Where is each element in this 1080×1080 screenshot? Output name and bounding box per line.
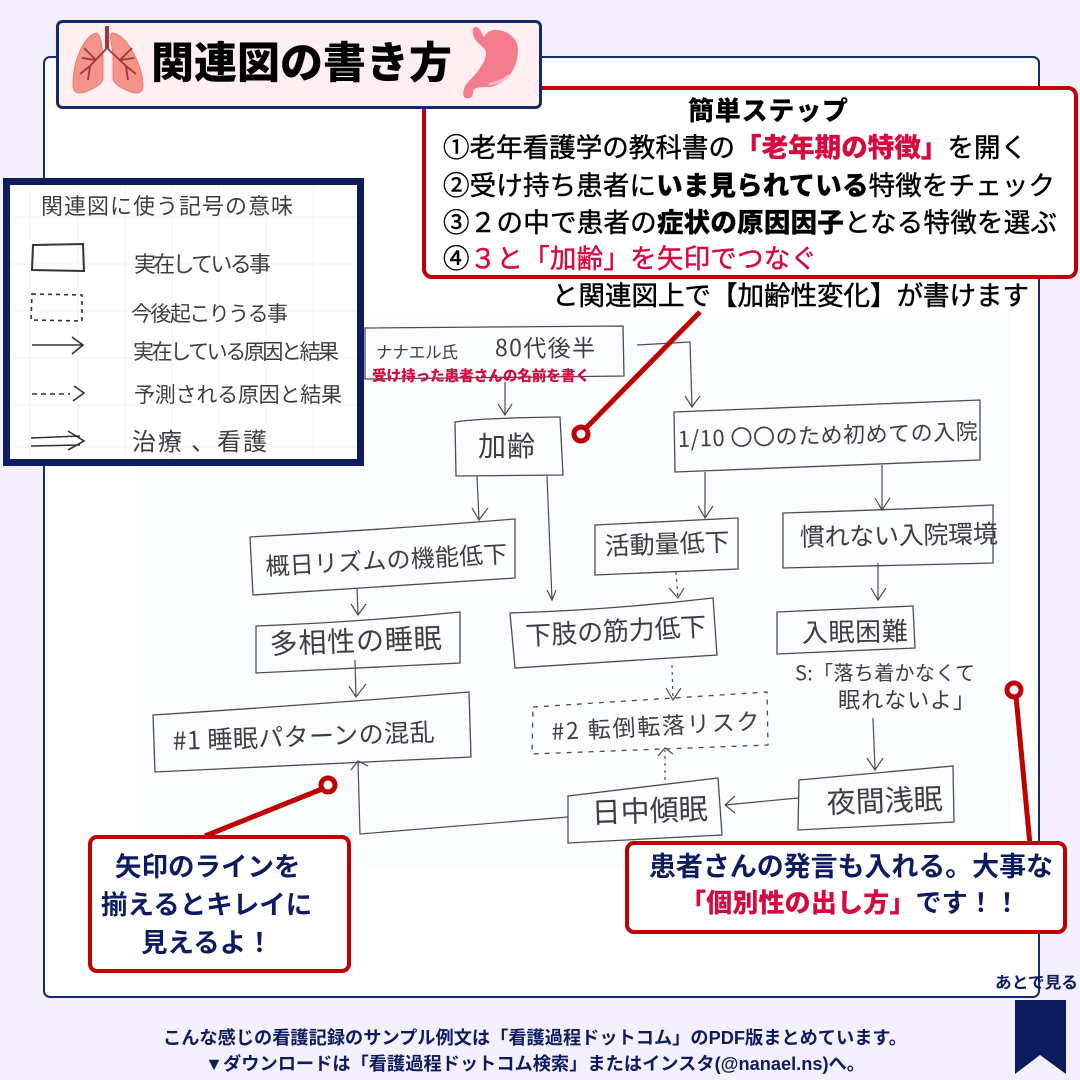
box: lower limb weakness <box>510 598 717 668</box>
footer text: こんな感じの看護記録のサンプル例文は「看護過程ドットコム」のPDF版まとめています。 <box>163 1027 907 1048</box>
legend row: dashed box <box>31 294 288 328</box>
legend grid <box>10 185 357 459</box>
legend row: solid arrow <box>32 336 339 366</box>
icon: stomach <box>463 27 518 98</box>
box: light night sleep <box>798 766 954 830</box>
legend row: double arrow <box>31 422 267 457</box>
box: first admission <box>674 400 980 472</box>
steps callout <box>424 88 1076 277</box>
legend row: solid box <box>32 244 271 279</box>
box: polyphasic sleep <box>256 612 460 673</box>
footer text: ▼ダウンロードは「看護過程ドットコム検索」またはインスタ(@nanael.ns)へ。 <box>205 1053 865 1074</box>
legend panel <box>6 182 360 462</box>
arrows <box>349 342 890 834</box>
box: aging <box>455 417 563 476</box>
box: reduced activity: 活動量低下 <box>604 523 730 563</box>
box: diagnosis 1: #1 睡眠パターンの混乱 <box>172 713 435 758</box>
callout: align arrow lines: 見えるよ！ <box>141 928 273 958</box>
box: aging: 加齢 <box>478 425 535 465</box>
box: daytime drowsiness <box>568 778 722 843</box>
step 4: ④３と「加齢」を矢印でつなぐ <box>443 244 817 274</box>
leader: aging <box>574 312 700 441</box>
step 3: ③２の中で患者の症状の原因因子となる特徴を選ぶ <box>443 208 1057 238</box>
red note: write patient's name: 受け持った患者さんの名前を書く <box>372 367 590 385</box>
legend title: 関連図に使う記号の意味 <box>41 189 293 221</box>
dashed box: diagnosis 2 <box>532 692 768 754</box>
leader: line up arrows <box>205 778 335 836</box>
legend row: dashed box: 今後起こりうる事 <box>131 298 288 328</box>
callout: patient statements: 患者さんの発言も入れる。大事な <box>649 852 1053 882</box>
callout: patient statements: 「個別性の出し方」です！！ <box>680 888 1020 918</box>
callout: align arrow lines: 揃えるとキレイに <box>101 890 312 920</box>
icon: lungs <box>73 26 143 93</box>
title banner <box>58 22 540 108</box>
box: unfamiliar environment: 慣れない入院環境 <box>800 515 998 554</box>
box: difficulty falling asleep: 入眠困難 <box>801 611 908 650</box>
step 2: ②受け持ち患者にいま見られている特徴をチェック <box>443 171 1055 201</box>
step 1: ①老年看護学の教科書の「老年期の特徴」を開く <box>443 133 1027 163</box>
icon: bookmark <box>1015 1000 1066 1074</box>
dashed box: diagnosis 2: #2 転倒転落リスク <box>551 702 760 747</box>
box: lower limb weakness: 下肢の筋力低下 <box>524 607 707 653</box>
callout: patient statements <box>627 843 1065 932</box>
callout: align arrow lines: 矢印のラインを <box>115 852 300 882</box>
footer text <box>163 1027 907 1074</box>
hand-drawn diagram photo <box>135 312 1010 869</box>
leader: patient statement <box>1007 683 1030 845</box>
box: patient name: 80代後半 <box>495 329 595 363</box>
heading text: 関連図の書き方 <box>151 40 452 88</box>
box: difficulty falling asleep <box>777 606 915 654</box>
box: unfamiliar environment <box>783 505 998 568</box>
callout: align arrow lines <box>90 837 349 971</box>
legend row: solid box: 実在している事 <box>134 247 271 279</box>
box: patient name: ナナエル氏 <box>376 339 458 363</box>
legend row: dashed arrow: 予測される原因と結果 <box>134 379 342 409</box>
box: daytime drowsiness: 日中傾眠 <box>591 786 708 832</box>
box: circadian rhythm <box>250 519 515 595</box>
box: first admission: 1/10 〇〇のため初めての入院 <box>677 414 978 454</box>
box: reduced activity <box>595 518 738 575</box>
legend row: solid arrow: 実在している原因と結果 <box>133 336 339 366</box>
legend row: dashed arrow <box>32 379 342 409</box>
patient quote: 眠れないよ」 <box>838 683 975 715</box>
patient quote: S:「落ち着かなくて <box>795 657 975 686</box>
box: polyphasic sleep: 多相性の睡眠 <box>269 617 442 663</box>
box: patient name <box>365 326 624 379</box>
box: circadian rhythm: 概日リズムの機能低下 <box>265 534 508 582</box>
steps heading: 簡単ステップ <box>688 96 848 126</box>
box: diagnosis 1 <box>153 692 471 772</box>
step conclusion: と関連図上で【加齢性変化】が書けます <box>552 281 1029 311</box>
box: light night sleep: 夜間浅眠 <box>826 776 943 822</box>
patient quote <box>795 657 975 715</box>
save label: あとで見る <box>995 974 1078 992</box>
legend row: double arrow: 治療 、看護 <box>132 422 267 457</box>
